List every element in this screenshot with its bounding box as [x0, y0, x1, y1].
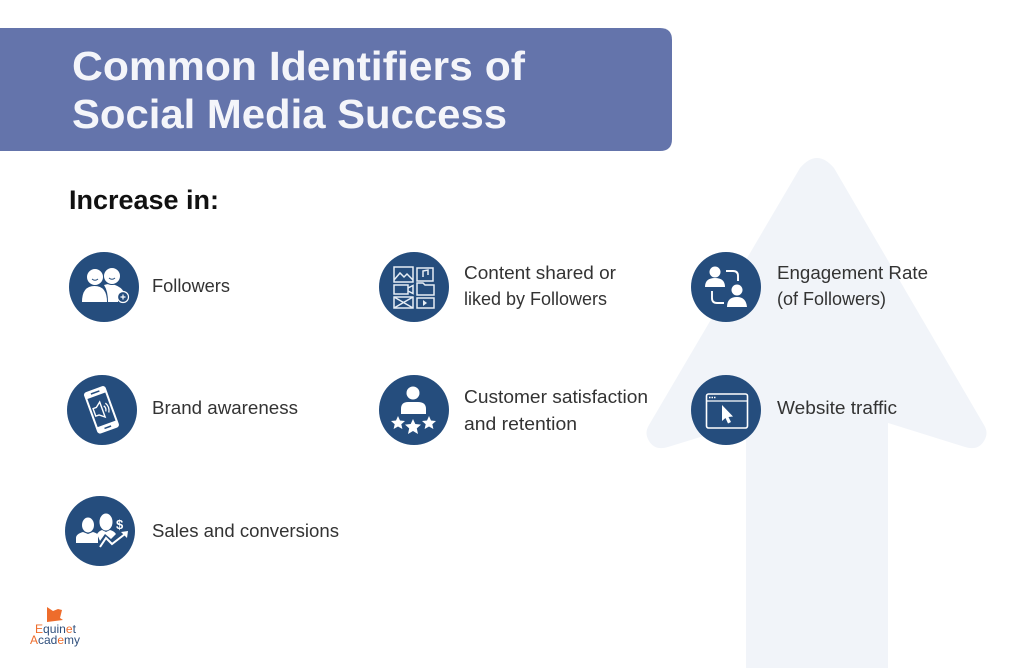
item: sales and conversions	[65, 496, 339, 566]
logo text: Equinet	[35, 622, 76, 636]
label: (of Followers)	[777, 289, 886, 309]
background arrow	[646, 158, 986, 668]
item: content shared	[379, 252, 616, 322]
logo: Equinet Academy	[30, 607, 80, 647]
item: followers	[69, 252, 230, 322]
icon: media grid	[379, 252, 449, 322]
icon: businesspeople with growth arrow	[65, 496, 135, 566]
icon: followers	[69, 252, 139, 322]
label: Website traffic	[777, 398, 897, 418]
label: Sales and conversions	[152, 521, 339, 541]
title banner	[0, 28, 672, 151]
subheading: Increase in:	[69, 185, 219, 215]
label: and retention	[464, 414, 577, 434]
label: Brand awareness	[152, 398, 298, 418]
icon: phone speaker	[67, 375, 137, 445]
label: Customer satisfaction	[464, 387, 648, 407]
icon: person with stars	[379, 375, 449, 445]
item: brand awareness	[67, 375, 298, 445]
label: Followers	[152, 276, 230, 296]
item: customer satisfaction	[379, 375, 648, 445]
label: Engagement Rate	[777, 263, 928, 283]
item: engagement rate	[691, 252, 928, 322]
icon: businesspeople with growth arrow: $	[116, 517, 124, 532]
label: liked by Followers	[464, 289, 607, 309]
title: Social Media Success	[72, 91, 507, 137]
title: Common Identifiers of	[72, 43, 525, 89]
icon: browser cursor	[691, 375, 761, 445]
label: Content shared or	[464, 263, 616, 283]
icon: logo mark	[47, 607, 63, 622]
item: website traffic	[691, 375, 897, 445]
icon: exchange people	[691, 252, 761, 322]
logo text: Academy	[30, 633, 80, 647]
